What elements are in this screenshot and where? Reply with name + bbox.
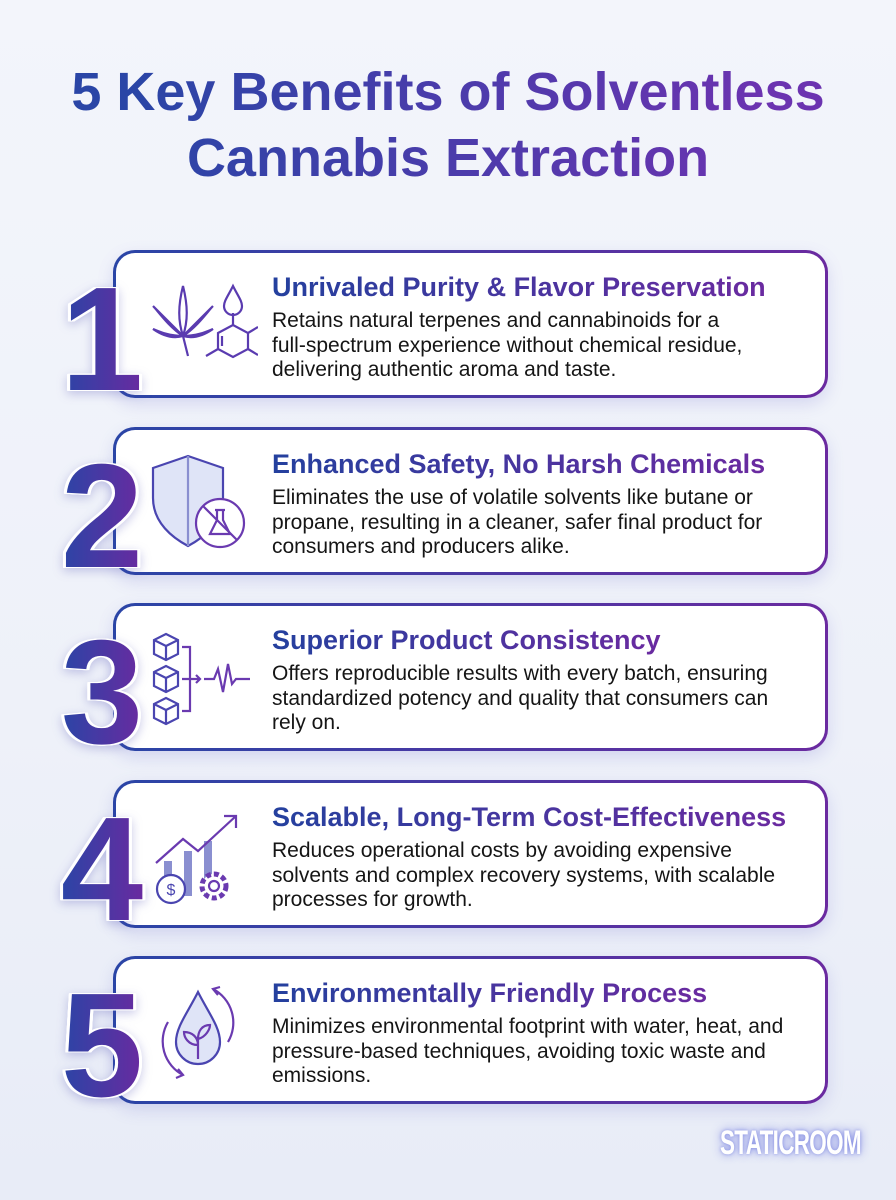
- text 5: Minimizes environmental footprint with water, heat, and pressure-based techniques, avoiding toxic waste and emissions.: [272, 1015, 783, 1087]
- number 3: 3: [61, 610, 143, 775]
- card 5: [113, 956, 828, 1104]
- title: Cannabis Extraction: [187, 128, 709, 188]
- heading 2: Enhanced Safety, No Harsh Chemicals: [272, 449, 765, 479]
- number 5: 5: [61, 963, 143, 1128]
- heading 1: Unrivaled Purity & Flavor Preservation: [272, 272, 766, 302]
- text 2: Eliminates the use of volatile solvents like butane or propane, resulting in a cleaner, safer final product for consumers and producers alike.: [272, 486, 762, 558]
- text 4: Reduces operational costs by avoiding expensive solvents and complex recovery systems, with scalable processes for growth.: [272, 839, 775, 911]
- card 2: [113, 427, 828, 575]
- number 2: 2: [61, 434, 143, 599]
- heading 3: Superior Product Consistency: [272, 625, 661, 655]
- icon: growth chart with coin and gear: $: [167, 882, 176, 899]
- card 1: [113, 250, 828, 398]
- card 3: [113, 603, 828, 751]
- text 3: Offers reproducible results with every batch, ensuring standardized potency and quality that consumers can rely on.: [272, 662, 768, 734]
- icon: cannabis leaf and molecule: [152, 284, 258, 358]
- icon: stacked cubes to waveform: [152, 632, 250, 726]
- icon: growth chart with coin and gear: [155, 814, 238, 904]
- heading 5: Environmentally Friendly Process: [272, 978, 707, 1008]
- card 4: [113, 780, 828, 928]
- number 1: 1: [61, 257, 143, 422]
- logo: STATICROOM: [720, 1124, 861, 1162]
- icon: shield with no-chemicals sign: [152, 454, 246, 548]
- title: 5 Key Benefits of Solventless: [71, 62, 825, 122]
- number 4: 4: [61, 787, 143, 952]
- icon: water drop with sprout in cycle: [162, 986, 234, 1079]
- title: [0, 59, 896, 191]
- heading 4: Scalable, Long-Term Cost-Effectiveness: [272, 802, 786, 832]
- text 1: Retains natural terpenes and cannabinoids for a full-spectrum experience without chemical residue, delivering authentic aroma and taste.: [272, 309, 742, 381]
